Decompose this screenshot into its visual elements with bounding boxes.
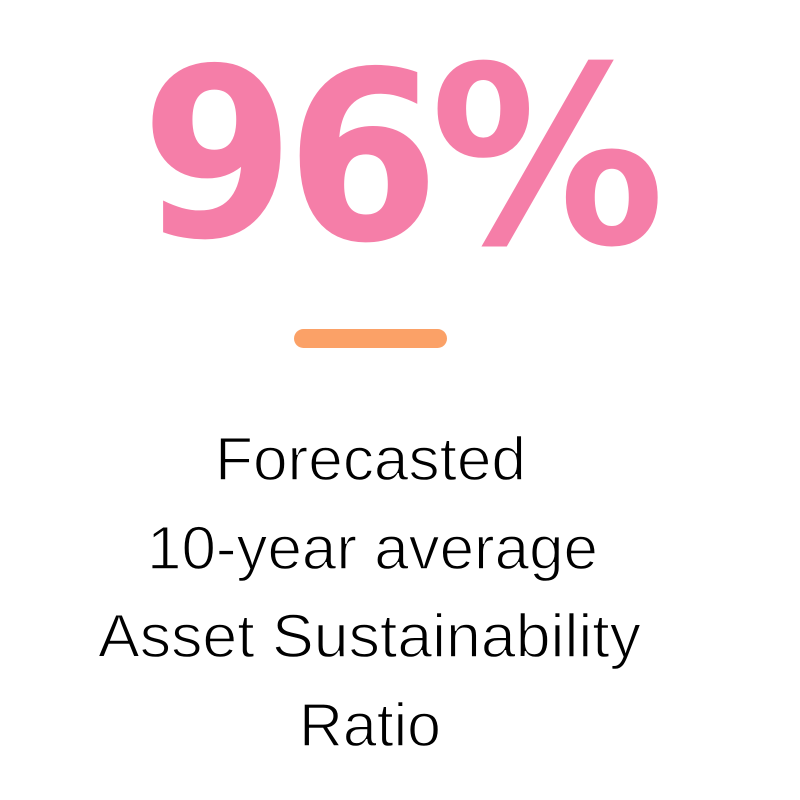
description text: Forecasted bbox=[215, 425, 526, 493]
headline figure: 96%: % bbox=[430, 13, 665, 301]
headline figure: 96%: 6 bbox=[286, 21, 440, 295]
description text bbox=[98, 425, 642, 759]
headline figure: 96%: 9 bbox=[141, 18, 295, 292]
divider bar bbox=[294, 329, 447, 348]
description text: 10-year average bbox=[147, 514, 598, 582]
headline figure: 96% bbox=[141, 13, 665, 301]
description text: Asset Sustainability bbox=[98, 602, 642, 670]
description text: Ratio bbox=[299, 691, 441, 759]
